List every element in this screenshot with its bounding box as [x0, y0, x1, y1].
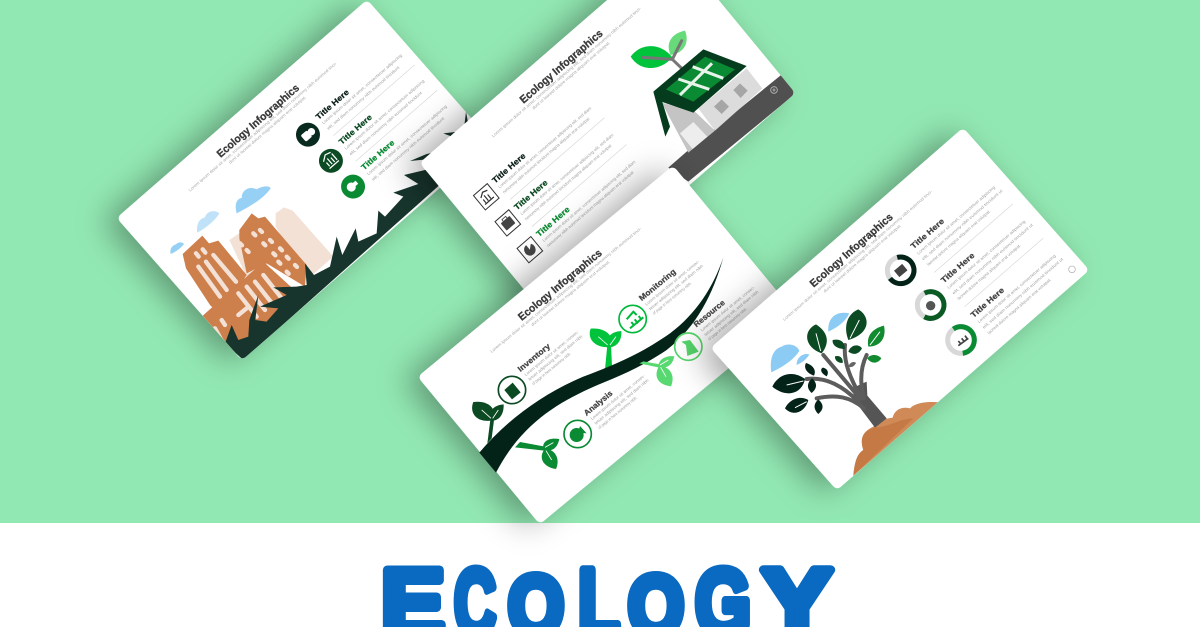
item text: elit, sed diam nonummy nibh euismod tincidunt [371, 115, 446, 182]
item text: Lorem ipsum dolor sit amet, consectetuer adipiscing [366, 103, 448, 176]
item text: elit, sed diam nonummy nibh euismod tincidunt [326, 64, 401, 131]
heading: Ecology Infographics [808, 211, 896, 290]
label: monitoring: of page in here nonummy nibh. [651, 280, 693, 316]
panel: growth stem slide [418, 166, 795, 524]
item title: Title Here [314, 87, 351, 121]
icon: resource flask [675, 333, 702, 360]
label: monitoring: Monitoring [637, 267, 678, 303]
building windows [194, 228, 300, 340]
panel: green house slide [420, 0, 797, 312]
item two [314, 71, 432, 178]
card background [418, 166, 795, 524]
card background [711, 128, 1089, 490]
leaves [631, 31, 687, 68]
label: monitoring [637, 251, 708, 316]
item one: Title Here [909, 216, 947, 251]
label: analysis: tetuer adipiscing elit, sed diam nibh [593, 377, 650, 426]
item text: Lorem ipsum dolor sit amet, consectetuer adipiscing [343, 78, 426, 151]
tree leaves [772, 309, 885, 414]
label: monitoring: Lorem ipsum dolor sit amet, consec- [644, 258, 701, 307]
label: resource: Lorem ipsum dolor sit amet, consec- [699, 284, 756, 332]
item text: nonummy nibh euismod tincidunt magna aliquam erat volutpat [524, 142, 613, 221]
item three [336, 96, 455, 203]
item title: Title Here [490, 151, 528, 185]
stem [479, 257, 723, 473]
plant: analysis [515, 439, 559, 469]
illustration: pale buildings [229, 207, 333, 280]
label: analysis: Analysis [582, 388, 615, 418]
item one: Lorem ipsum dolor sit amet, consectetuer adipiscing [916, 184, 997, 256]
item three [969, 243, 1070, 336]
label: inventory: of page in here nonummy nibh. [531, 351, 572, 386]
label: resource: tetuer adipiscing elit, sed diam nibh [703, 289, 760, 337]
ground bar [668, 74, 797, 182]
subtitle line two: dunt ut laoreet dolore magna aliquam erat volutpat. [531, 40, 611, 111]
icon: monitoring chart [619, 305, 646, 333]
item text: elit, sed diam nonummy nibh euismod tincidunt [348, 90, 424, 156]
text block [482, 186, 764, 453]
subtitle: Lorem ipsum dolor sit amet, consectetuer adipiscing elit, sed diam nonummy nibh euismod tinci- [491, 5, 643, 138]
icon: chart [314, 144, 348, 178]
label: inventory: tetuer adipiscing elit, sed diam nibh [527, 333, 584, 382]
ring: progress one [884, 254, 917, 287]
item text: Lorem ipsum dolor sit amet, consectetuer adipiscing [321, 52, 404, 125]
item three: Lorem ipsum dolor sit amet, consectetuer adipiscing [976, 253, 1057, 324]
item two: Lorem ipsum dolor sit amet, consectetuer adipiscing [946, 219, 1027, 290]
item three [516, 151, 641, 264]
icon: briefcase box [495, 210, 521, 236]
item two: laoreet dolore magna aliquam erat volutpat. [956, 243, 1022, 301]
roof with solar panel [653, 49, 747, 137]
icon: light bulb [336, 170, 370, 203]
soil mound [853, 402, 940, 476]
plant: resource [639, 356, 674, 386]
plant: monitoring [590, 329, 621, 369]
icon: inventory clipboard [498, 376, 526, 404]
label: resource: of page in here nonummy nibh. [707, 306, 748, 341]
label: resource [692, 277, 764, 343]
text block [445, 0, 718, 264]
heading: Ecology Infographics [516, 247, 605, 323]
subtitle: Lorem ipsum dolor sit amet, consectetuer adipiscing elit, sed diam nonummy nibh euismod tinci- [187, 60, 338, 193]
panel: tree slide [711, 128, 1089, 490]
item one [909, 174, 1009, 267]
subtitle line two: dunt ut laoreet dolore magna aliquam erat volutpat. [530, 259, 611, 327]
item title: Title Here [337, 112, 374, 146]
panel: city slide [117, 0, 492, 360]
label: monitoring: tetuer adipiscing elit, sed diam nibh [648, 263, 705, 311]
illustration: tree [771, 254, 1075, 476]
label: analysis: Lorem ipsum dolor sit amet, consec- [590, 373, 646, 421]
house walls [662, 68, 762, 153]
item one [291, 44, 409, 152]
heading: Ecology Infographics [518, 28, 605, 106]
item text: Lorem ipsum dolor sit amet, consectetuer adipiscing elit, sed diam [519, 132, 615, 216]
illustration: city and grass [170, 112, 490, 360]
subtitle: Lorem ipsum dolor sit amet, consectetuer adipiscing elit, sed diam nonummy nibh euismod tinci- [782, 188, 934, 322]
subtitle line two: dunt ut laoreet dolore magna aliquam erat volutpat. [228, 95, 307, 165]
ring: progress three [945, 324, 977, 356]
text block [181, 15, 456, 278]
heading: Ecology Infographics [215, 82, 302, 160]
subtitle: Lorem ipsum dolor sit amet, consectetuer adipiscing elit, sed diam nonummy nibh euismod tinci- [489, 226, 643, 354]
card background [117, 0, 492, 360]
icon: small circle mark [771, 87, 777, 93]
item two [939, 208, 1039, 301]
item three: laoreet dolore magna aliquam erat volutpat. [986, 277, 1052, 335]
icon: chart box [473, 184, 499, 210]
item title: Title Here [534, 204, 572, 239]
item text: nonummy nibh euismod tincidunt magna aliquam erat volutpat [502, 116, 591, 194]
subtitle line two: dunt ut laoreet dolore magna aliquam erat volutpat. [822, 223, 902, 294]
item one: elit, sed diam nonummy nibh euismod tincidunt ut [921, 188, 1004, 261]
text block [775, 145, 1070, 430]
item one: laoreet dolore magna aliquam erat volutpat. [926, 209, 992, 267]
item three: Title Here [969, 285, 1007, 320]
icon: clouds [170, 186, 271, 254]
item two: elit, sed diam nonummy nibh euismod tincidunt ut [951, 222, 1035, 295]
item title: Title Here [512, 178, 550, 212]
plant: inventory [472, 402, 504, 443]
illustration: solar house [631, 31, 797, 182]
illustration: orange buildings [183, 213, 307, 353]
label: analysis: of page in here nonummy nibh. [597, 395, 638, 430]
icon: pie box [517, 237, 543, 263]
icon: coins [291, 118, 325, 152]
illustration: stem and plants [472, 257, 723, 473]
card background [420, 0, 795, 312]
label: inventory [516, 321, 588, 387]
label: inventory: Lorem ipsum dolor sit amet, consec- [523, 329, 580, 377]
item text: Lorem ipsum dolor sit amet, consectetuer adipiscing elit, sed diam [541, 159, 637, 243]
label: inventory: Inventory [516, 341, 553, 374]
illustration: grass [225, 112, 490, 360]
icon: small circle mark [1069, 266, 1075, 273]
item three: elit, sed diam nonummy nibh euismod tincidunt ut [981, 256, 1065, 330]
ring: progress two [914, 289, 946, 321]
label: resource: Resource [692, 298, 727, 329]
tree trunk and branches [807, 345, 887, 428]
item two [494, 124, 619, 237]
item title: Title Here [359, 138, 397, 172]
item text: Lorem ipsum dolor sit amet, consectetuer adipiscing elit, sed diam [497, 105, 593, 189]
item two: Title Here [939, 250, 977, 285]
item one [472, 98, 597, 211]
label: analysis [582, 365, 654, 431]
item text: nonummy nibh euismod tincidunt magna aliquam erat volutpat [546, 169, 635, 248]
icon: analysis pie [564, 420, 591, 448]
icon: clouds [771, 313, 849, 372]
